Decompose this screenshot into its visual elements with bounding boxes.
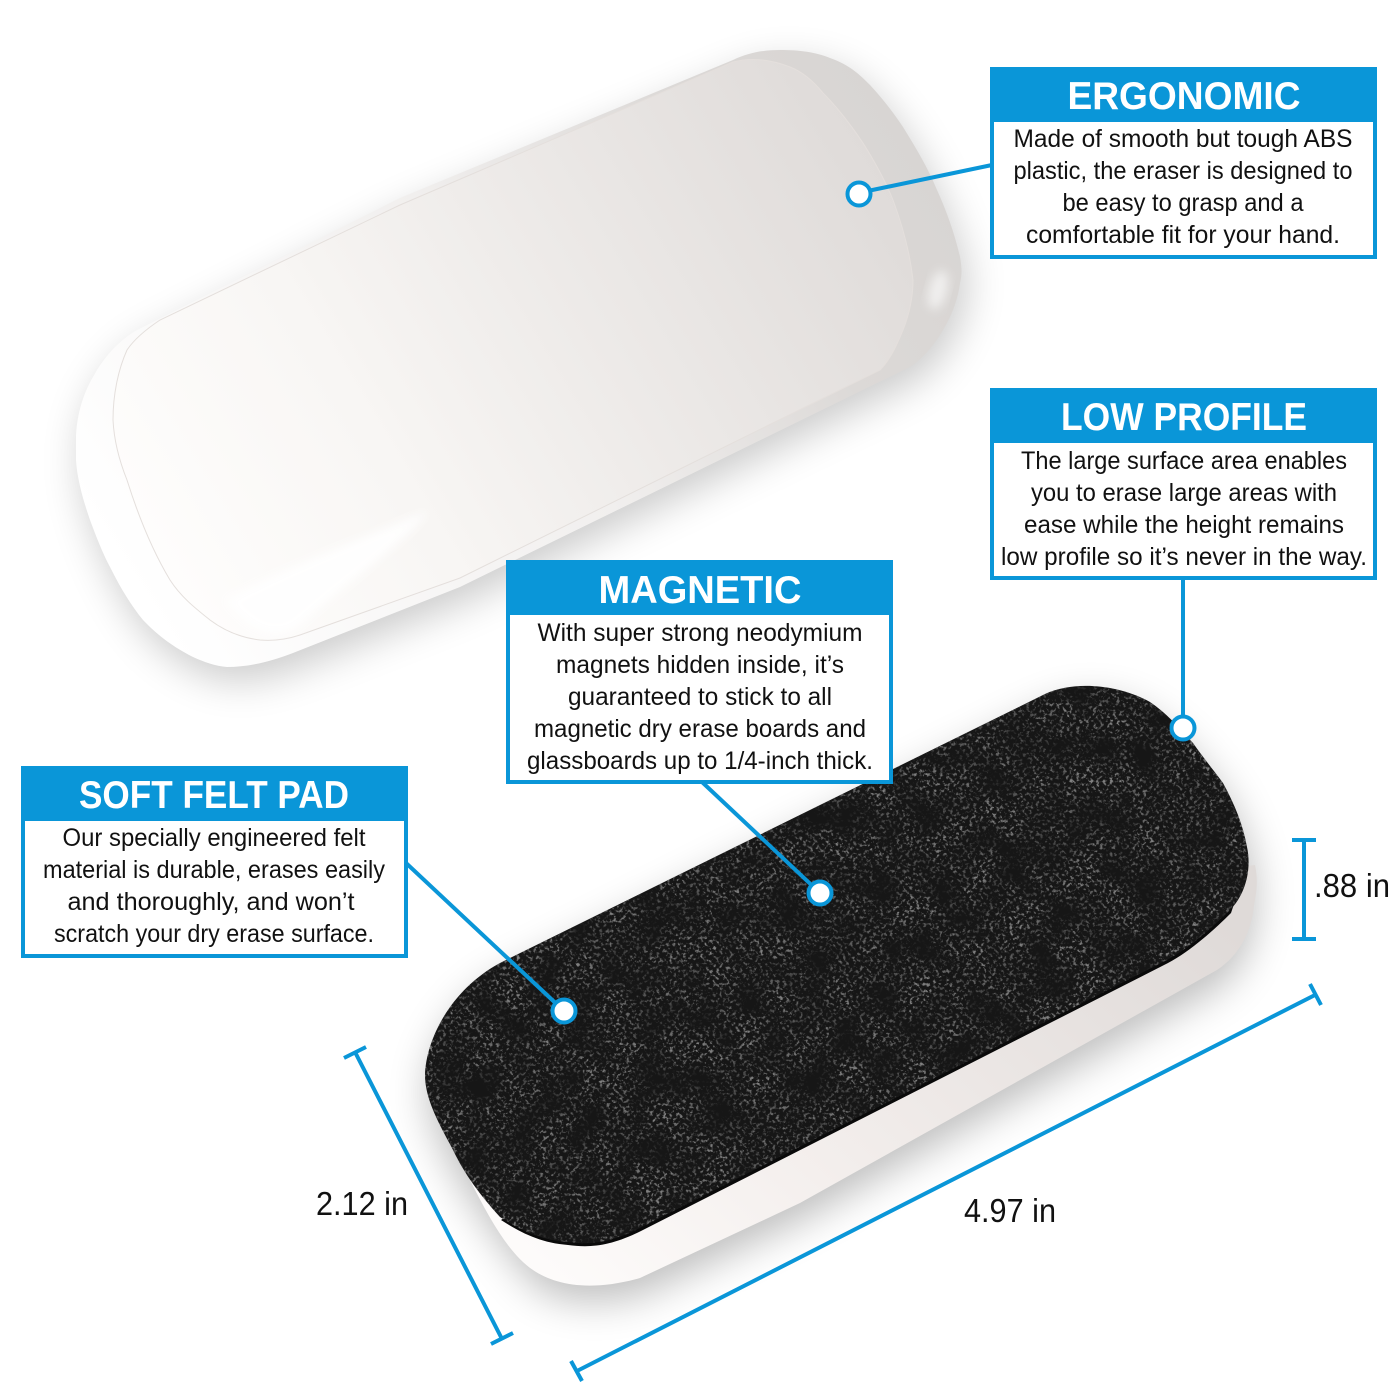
callout: magnetic: MAGNETIC bbox=[598, 569, 802, 612]
callout: soft felt pad: scratch your dry erase surface. bbox=[54, 920, 374, 948]
callout: low profile bbox=[992, 390, 1375, 740]
bottom eraser shadow bbox=[428, 701, 1256, 1302]
callout: ergonomic bbox=[848, 69, 1375, 257]
callout: soft felt pad: SOFT FELT PAD bbox=[79, 774, 349, 817]
callout: low profile: The large surface area enables bbox=[1021, 447, 1347, 475]
top eraser shadow bbox=[82, 64, 968, 681]
callout: soft felt pad: material is durable, erases easily bbox=[43, 856, 385, 884]
callout: soft felt pad bbox=[23, 768, 576, 1022]
marker dot bbox=[1172, 716, 1194, 740]
dimension: width bbox=[316, 1047, 513, 1344]
callout: magnetic: guaranteed to stick to all bbox=[568, 683, 832, 711]
leader line bbox=[702, 782, 820, 893]
dimension: height bbox=[1292, 840, 1390, 939]
felt pad bbox=[425, 686, 1249, 1243]
icon: eraser felt view bbox=[425, 686, 1257, 1286]
callout: ergonomic: be easy to grasp and a bbox=[1062, 189, 1304, 217]
callout: low profile: LOW PROFILE bbox=[1061, 396, 1307, 439]
callout: soft felt pad: Our specially engineered felt bbox=[62, 824, 366, 852]
dimension: width: 2.12 in bbox=[316, 1185, 408, 1222]
callout: low profile: you to erase large areas with bbox=[1031, 479, 1337, 507]
leader line bbox=[406, 863, 564, 1011]
leader line bbox=[1181, 578, 1185, 716]
marker dot bbox=[552, 1000, 576, 1022]
callout: soft felt pad: and thoroughly, and won’t bbox=[68, 888, 355, 916]
felt edge bbox=[501, 883, 1241, 1246]
dimension: length: 4.97 in bbox=[964, 1192, 1056, 1229]
callout: ergonomic: plastic, the eraser is designed to bbox=[1014, 157, 1352, 185]
dimension: height: .88 in bbox=[1314, 867, 1390, 904]
icon: eraser top view bbox=[76, 50, 962, 667]
callout: magnetic: With super strong neodymium bbox=[538, 619, 862, 647]
callout: magnetic: magnetic dry erase boards and bbox=[534, 715, 866, 743]
callout: magnetic: glassboards up to 1/4-inch thick. bbox=[527, 747, 873, 775]
callout: magnetic: magnets hidden inside, it’s bbox=[556, 651, 844, 679]
marker dot bbox=[848, 182, 870, 206]
callout: magnetic bbox=[508, 562, 891, 904]
callout: ergonomic: ERGONOMIC bbox=[1068, 75, 1300, 118]
callout: ergonomic: comfortable fit for your hand. bbox=[1026, 221, 1340, 249]
callout: ergonomic: Made of smooth but tough ABS bbox=[1014, 125, 1352, 153]
leader line bbox=[858, 165, 992, 193]
marker dot bbox=[808, 882, 832, 904]
callout: low profile: low profile so it’s never in the way. bbox=[1001, 543, 1367, 571]
eraser base bbox=[470, 865, 1257, 1286]
dimension: length bbox=[571, 984, 1321, 1381]
callout: low profile: ease while the height remains bbox=[1024, 511, 1344, 539]
